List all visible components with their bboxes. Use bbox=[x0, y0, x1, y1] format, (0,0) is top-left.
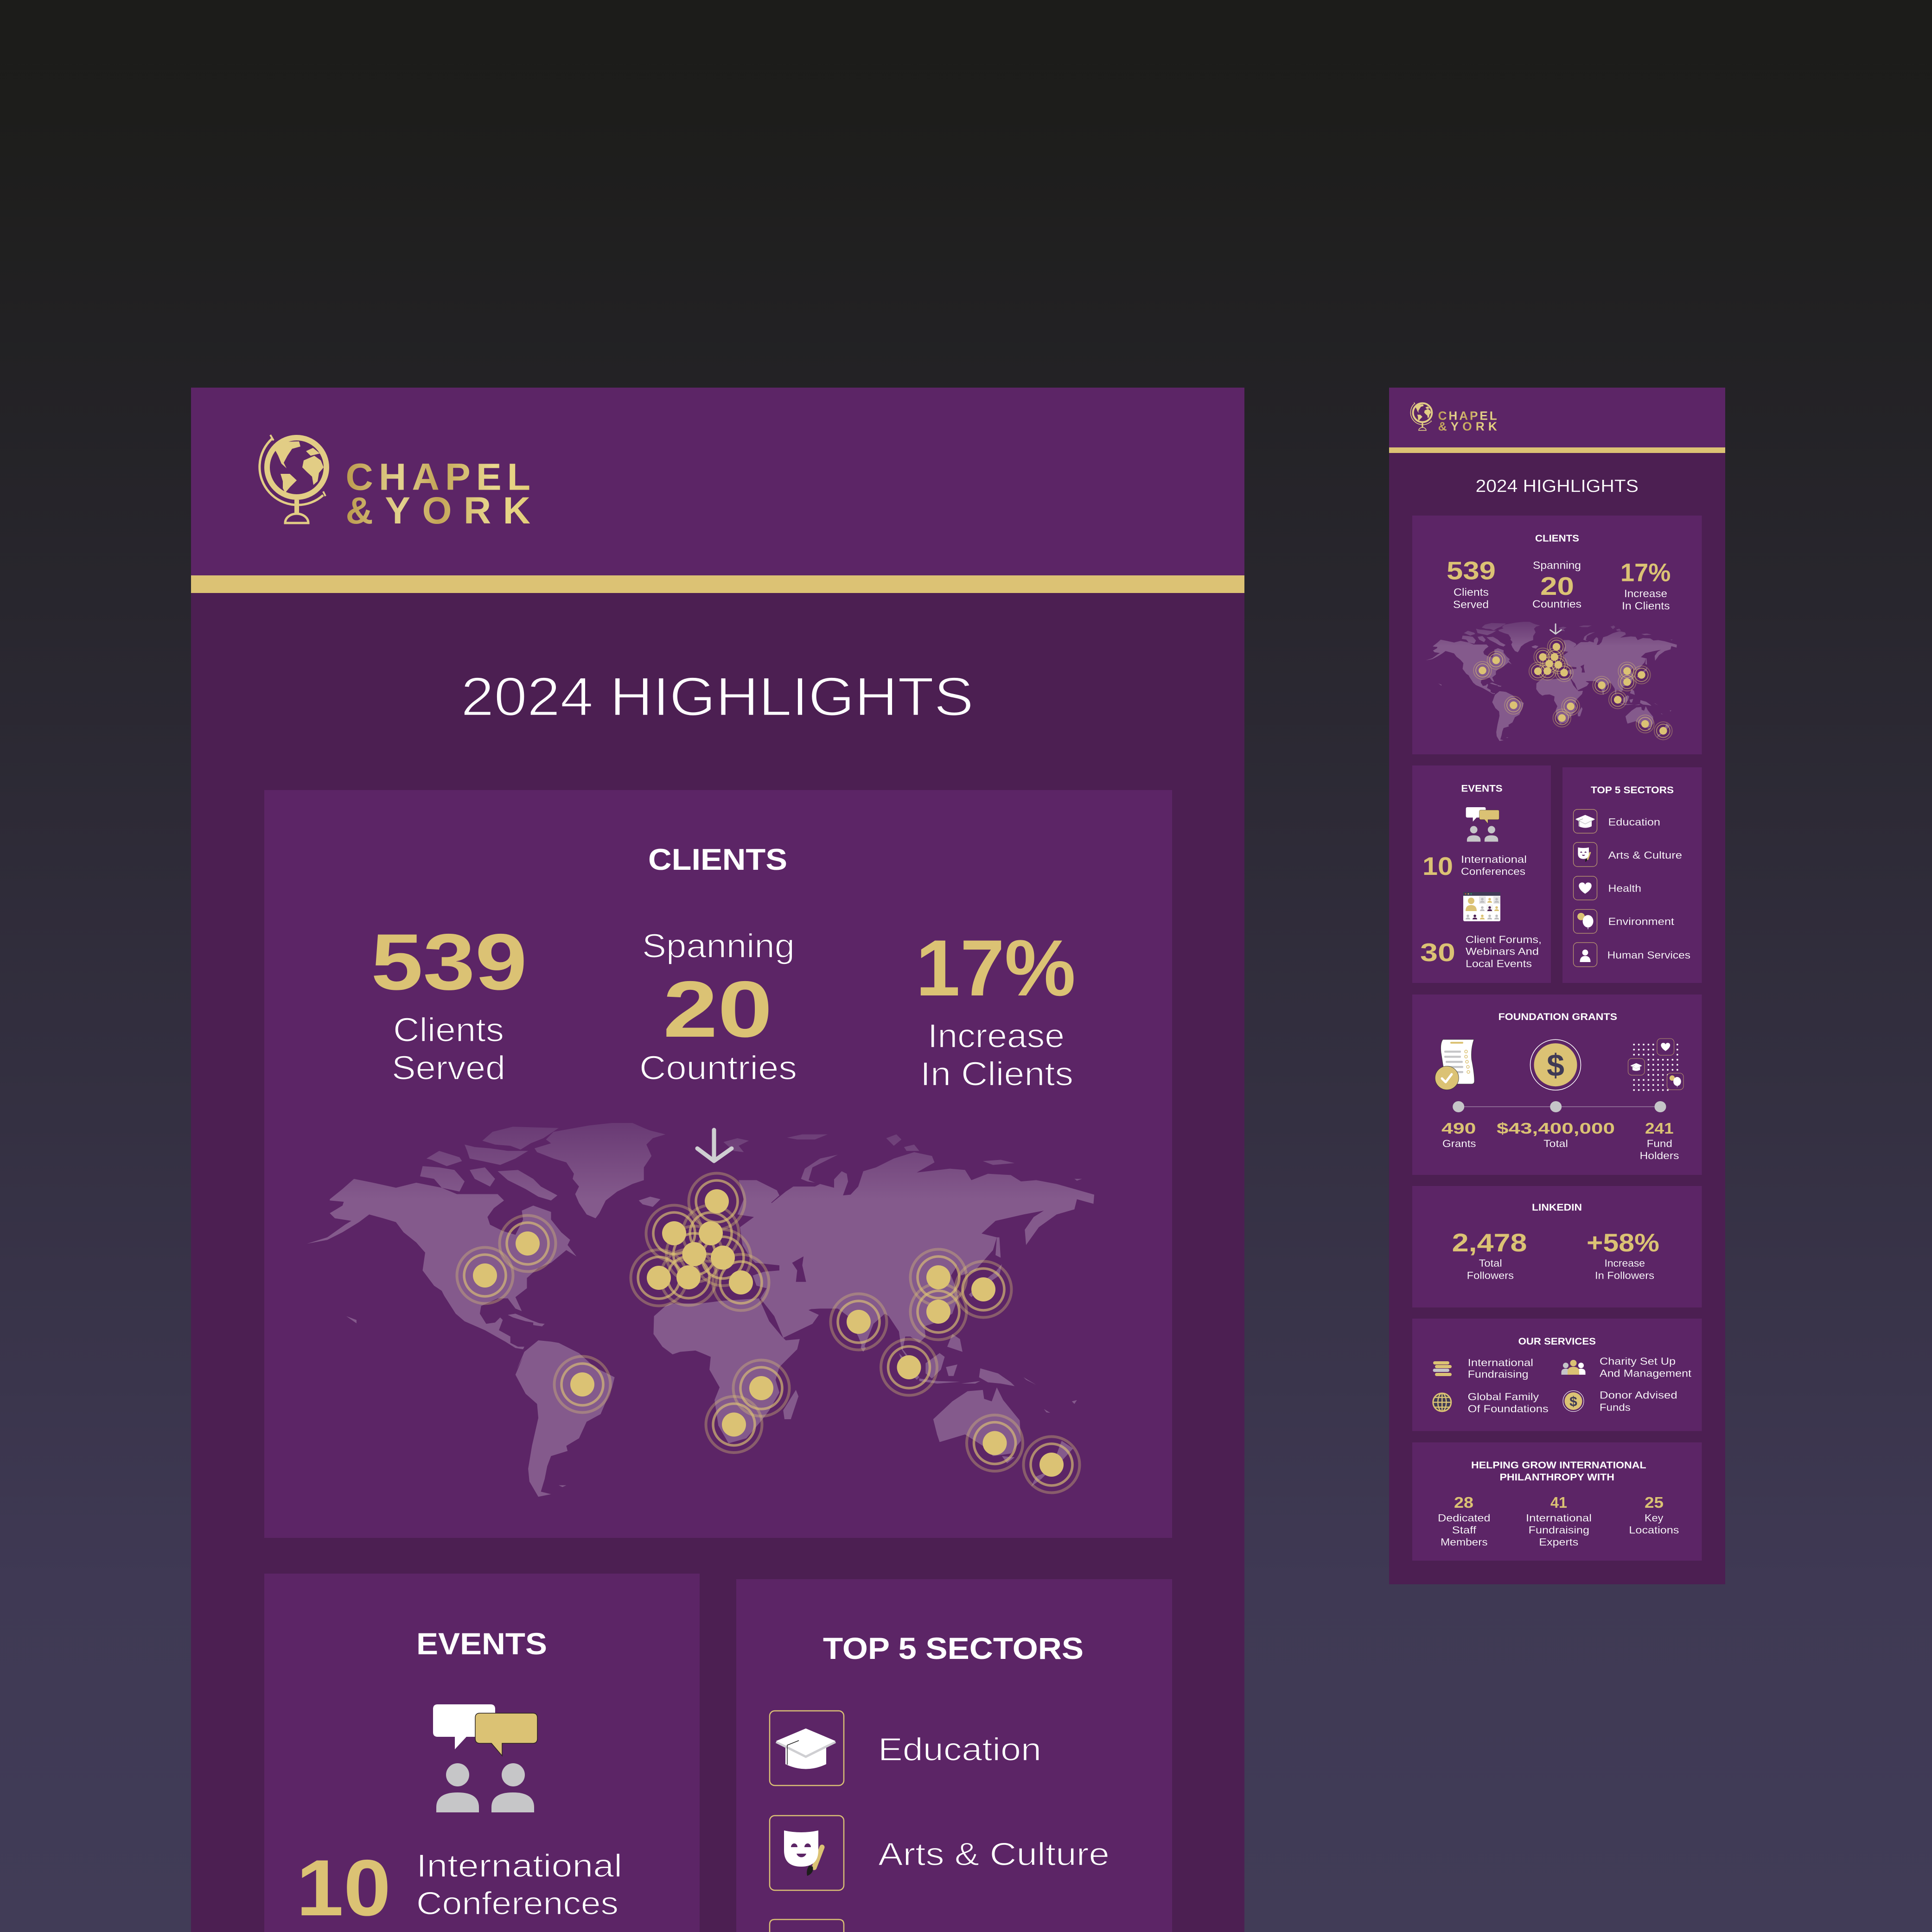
small sheet background bbox=[1389, 388, 1725, 1584]
panel: clients bbox=[264, 790, 1172, 1538]
stat: countries: Countries bbox=[639, 1050, 797, 1087]
small stat: client forums bbox=[1420, 934, 1542, 969]
service: donor advised funds: Funds bbox=[1600, 1402, 1631, 1413]
stat: total: $43,400,000 bbox=[1497, 1120, 1615, 1137]
small panel: our services bbox=[1412, 1319, 1702, 1431]
small stat: client forums: Local Events bbox=[1466, 958, 1532, 969]
stat: total followers: Followers bbox=[1467, 1270, 1514, 1282]
small panel: clients bbox=[1412, 516, 1702, 754]
stat: international conferences: Conferences bbox=[416, 1885, 618, 1921]
sectors panel background bbox=[736, 1579, 1172, 1932]
icon: dotted fund holders bbox=[1628, 1039, 1683, 1092]
panel: large infographic sheet bbox=[191, 388, 1244, 1932]
sector: health box top bbox=[770, 1919, 844, 1932]
world map bbox=[307, 1123, 1094, 1497]
small stat: countries: Spanning bbox=[1533, 559, 1581, 571]
small heading: events: EVENTS bbox=[1461, 784, 1503, 794]
small gold divider bar bbox=[1389, 447, 1725, 453]
small stat: increase in clients: 17% bbox=[1620, 558, 1671, 587]
small icon: webinar screen bbox=[1463, 892, 1500, 921]
grants background bbox=[1412, 995, 1702, 1175]
stat: international conferences bbox=[296, 1843, 622, 1932]
stat: key locations: 25 bbox=[1645, 1494, 1664, 1511]
small sector: environment bbox=[1574, 910, 1674, 933]
events panel background bbox=[264, 1574, 700, 1932]
small sector: arts and culture: Arts & Culture bbox=[1608, 849, 1682, 861]
small stat: international conferences bbox=[1422, 852, 1527, 880]
stat: clients served: Clients bbox=[393, 1012, 504, 1049]
heading: foundation grants: FOUNDATION GRANTS bbox=[1498, 1012, 1617, 1022]
stat: international fundraising experts: Experts bbox=[1539, 1536, 1578, 1548]
small stat: countries: 20 bbox=[1540, 572, 1574, 600]
small sector: arts and culture bbox=[1574, 842, 1682, 867]
heading: helping grow international philanthropy bbox=[1471, 1460, 1646, 1483]
small stat: clients served bbox=[1447, 556, 1496, 611]
small sectors background bbox=[1562, 767, 1702, 983]
gold divider bar bbox=[191, 575, 1244, 593]
service: charity set up: And Management bbox=[1600, 1367, 1691, 1379]
service: donor advised funds bbox=[1563, 1389, 1677, 1413]
stat: increase in followers: In Followers bbox=[1595, 1270, 1654, 1282]
stat: international fundraising experts bbox=[1526, 1494, 1592, 1548]
icon: conference speech bubbles bbox=[433, 1704, 537, 1812]
logo: Chapel & York: &YORK bbox=[346, 490, 530, 532]
stat: fund holders: Holders bbox=[1639, 1150, 1679, 1161]
stat: dedicated staff members: Dedicated bbox=[1438, 1512, 1491, 1524]
small stat: increase in clients: Increase bbox=[1624, 587, 1667, 599]
stat: increase in followers: +58% bbox=[1587, 1228, 1659, 1257]
small logo: &YORK bbox=[1438, 420, 1497, 434]
small heading: top 5 sectors: TOP 5 SECTORS bbox=[1591, 785, 1674, 796]
stat: total followers bbox=[1452, 1228, 1527, 1282]
title: 2024 HIGHLIGHTS bbox=[461, 666, 974, 727]
small panel: helping grow philanthropy bbox=[1412, 1442, 1702, 1561]
stat: increase in clients: In Clients bbox=[920, 1056, 1073, 1093]
small stat: countries bbox=[1532, 559, 1581, 610]
stat: total followers: 2,478 bbox=[1452, 1228, 1527, 1257]
stat: grants: 490 bbox=[1441, 1120, 1476, 1137]
small stat: international conferences: International bbox=[1461, 854, 1527, 865]
stat: increase in clients: 17% bbox=[916, 924, 1076, 1013]
small stat: international conferences: Conferences bbox=[1461, 866, 1525, 877]
heading: our services: OUR SERVICES bbox=[1518, 1336, 1596, 1347]
small panel: events bbox=[1412, 765, 1551, 983]
helping background bbox=[1412, 1442, 1702, 1561]
stat: grants: Grants bbox=[1442, 1138, 1476, 1149]
service: international fundraising: International bbox=[1468, 1357, 1533, 1368]
small stat: countries: Countries bbox=[1532, 598, 1581, 610]
stat: total: Total bbox=[1543, 1138, 1568, 1149]
icon: grant document with check bbox=[1435, 1039, 1474, 1090]
stat: key locations: Locations bbox=[1629, 1524, 1679, 1536]
heading: top 5 sectors: TOP 5 SECTORS bbox=[823, 1631, 1084, 1665]
stat: total followers: Total bbox=[1479, 1257, 1502, 1269]
panel: top 5 sectors bbox=[736, 1579, 1172, 1932]
linkedin background bbox=[1412, 1186, 1702, 1307]
sector: arts and culture bbox=[770, 1816, 1109, 1890]
small logo bbox=[1410, 402, 1497, 434]
sector: education bbox=[770, 1711, 1041, 1785]
stat: international fundraising experts: International bbox=[1526, 1512, 1592, 1524]
stat: total bbox=[1497, 1120, 1615, 1149]
sector: arts and culture: Arts & Culture bbox=[878, 1836, 1109, 1872]
small sector: health bbox=[1574, 876, 1641, 900]
service: donor advised funds: $ bbox=[1569, 1394, 1577, 1409]
small stat: client forums: 30 bbox=[1420, 938, 1455, 967]
small stat: client forums: Client Forums, bbox=[1466, 934, 1542, 945]
small stat: international conferences: 10 bbox=[1422, 852, 1453, 880]
sector: education: Education bbox=[878, 1731, 1041, 1767]
heading: events: EVENTS bbox=[416, 1626, 547, 1661]
heading: linkedin: LINKEDIN bbox=[1532, 1202, 1582, 1213]
small sector: human services bbox=[1574, 943, 1690, 967]
stat: international fundraising experts: Fundraising bbox=[1529, 1524, 1589, 1536]
service: donor advised funds: Donor Advised bbox=[1600, 1389, 1677, 1401]
small header band bbox=[1389, 388, 1725, 447]
small events background bbox=[1412, 765, 1551, 983]
stat: clients served: Served bbox=[392, 1050, 505, 1087]
small sector: education: Education bbox=[1608, 816, 1660, 828]
small stat: clients served: Clients bbox=[1454, 586, 1489, 598]
stat: fund holders bbox=[1639, 1120, 1679, 1161]
stat: countries: 20 bbox=[663, 965, 772, 1054]
sheet background bbox=[191, 388, 1244, 1932]
stat: dedicated staff members: 28 bbox=[1454, 1494, 1473, 1511]
stat: clients served bbox=[371, 918, 527, 1087]
small world map with pins bbox=[1426, 622, 1677, 741]
logo: Chapel & York bbox=[260, 435, 530, 532]
stat: clients served: 539 bbox=[371, 918, 527, 1007]
stat: increase in clients bbox=[916, 924, 1076, 1093]
arrow pointing to map bbox=[697, 1130, 732, 1161]
small stat: client forums: Webinars And bbox=[1466, 946, 1539, 957]
service: charity set up bbox=[1562, 1356, 1691, 1379]
small sector: education bbox=[1574, 810, 1660, 833]
stat: grants bbox=[1441, 1120, 1476, 1149]
service: international fundraising: Fundraising bbox=[1468, 1369, 1529, 1380]
stat: increase in followers: Increase bbox=[1604, 1257, 1645, 1269]
small clients background bbox=[1412, 516, 1702, 754]
heading: clients: CLIENTS bbox=[648, 842, 787, 876]
service: global family of foundations bbox=[1433, 1391, 1549, 1415]
services background bbox=[1412, 1319, 1702, 1431]
small sector: health: Health bbox=[1608, 883, 1641, 894]
small stat: clients served: 539 bbox=[1447, 556, 1496, 585]
stat: dedicated staff members: Members bbox=[1441, 1536, 1487, 1548]
stat: countries: Spanning bbox=[642, 928, 795, 965]
small stat: clients served: Served bbox=[1453, 599, 1489, 611]
small panel: top 5 sectors bbox=[1562, 767, 1702, 983]
small stat: increase in clients bbox=[1620, 558, 1671, 612]
heading: helping grow international philanthropy: HELPING GROW INTERNATIONAL bbox=[1471, 1460, 1646, 1471]
clients panel background bbox=[264, 790, 1172, 1538]
small title: 2024 HIGHLIGHTS bbox=[1475, 477, 1639, 496]
stat: international fundraising experts: 41 bbox=[1550, 1494, 1567, 1511]
small stat: increase in clients: In Clients bbox=[1622, 600, 1670, 612]
panel: small infographic sheet bbox=[1389, 388, 1725, 1584]
header band bbox=[191, 388, 1244, 575]
small icon: speech bubbles bbox=[1466, 807, 1499, 842]
stat: dedicated staff members: Staff bbox=[1452, 1524, 1477, 1536]
service: charity set up: Charity Set Up bbox=[1600, 1356, 1676, 1367]
map location pins bbox=[457, 1173, 1079, 1493]
service: international fundraising bbox=[1433, 1357, 1533, 1380]
panel: events bbox=[264, 1574, 700, 1932]
small logo: CHAPEL bbox=[1438, 409, 1497, 423]
service: global family of foundations: Of Foundations bbox=[1468, 1403, 1549, 1415]
small sector: environment: Environment bbox=[1608, 916, 1674, 927]
service: global family of foundations: Global Family bbox=[1468, 1391, 1539, 1403]
small panel: linkedin bbox=[1412, 1186, 1702, 1307]
stat: increase in followers bbox=[1587, 1228, 1659, 1282]
stat: international conferences: 10 bbox=[296, 1843, 391, 1932]
small panel: foundation grants bbox=[1412, 995, 1702, 1175]
icon: dollar coin bbox=[1530, 1039, 1581, 1090]
icon: dollar coin: $ bbox=[1547, 1048, 1564, 1083]
logo: Chapel & York: CHAPEL bbox=[346, 456, 530, 498]
timeline bbox=[1453, 1101, 1666, 1112]
stat: key locations: Key bbox=[1645, 1512, 1663, 1524]
stat: fund holders: Fund bbox=[1647, 1138, 1672, 1149]
heading: helping grow international philanthropy: PHILANTHROPY WITH bbox=[1499, 1472, 1614, 1483]
stat: international conferences: International bbox=[416, 1848, 622, 1884]
small heading: clients: CLIENTS bbox=[1535, 533, 1579, 544]
stat: dedicated staff members bbox=[1438, 1494, 1491, 1548]
stat: key locations bbox=[1629, 1494, 1679, 1536]
stat: increase in clients: Increase bbox=[928, 1018, 1065, 1055]
stat: fund holders: 241 bbox=[1645, 1120, 1674, 1137]
small sector: human services: Human Services bbox=[1607, 950, 1690, 961]
stat: countries bbox=[639, 928, 797, 1087]
